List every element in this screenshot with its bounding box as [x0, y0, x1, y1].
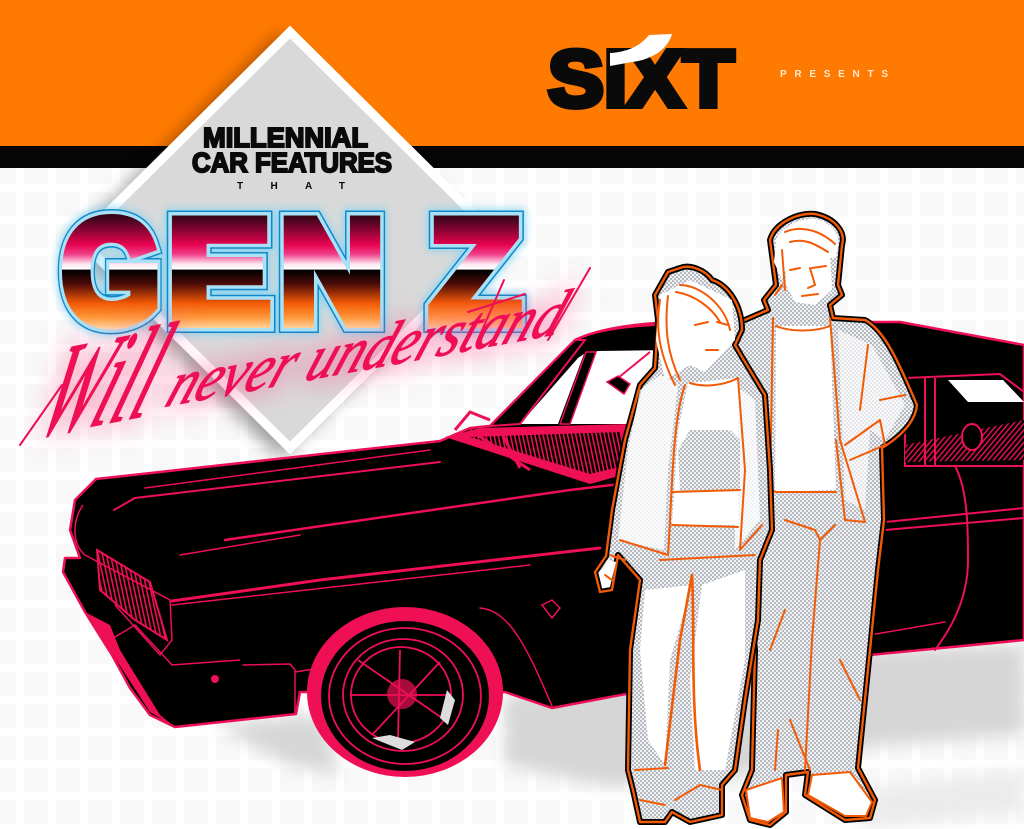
- title: GEN Z chrome lettering: Z: [430, 190, 520, 353]
- woman hair and face: [656, 280, 735, 380]
- script tagline: will never understand: [20, 268, 590, 468]
- header band: [0, 0, 1024, 168]
- man hair highlight: [774, 219, 838, 280]
- title: millennial car features that: [192, 122, 392, 192]
- ground shadow: [215, 645, 1024, 829]
- car body lines: [114, 450, 1024, 714]
- woman hand: [599, 560, 616, 588]
- man detail lines: [770, 229, 905, 770]
- man tee: [775, 326, 836, 492]
- title: GEN Z chrome lettering: N: [280, 190, 384, 353]
- car grille and front end: [75, 505, 240, 727]
- man jacket highlight: [838, 330, 905, 510]
- presents label: PRESENTS: [780, 69, 888, 80]
- car cowl and wipers: [445, 324, 680, 484]
- woman jacket highlight: [618, 375, 678, 550]
- title: GEN Z chrome lettering: N: [280, 190, 384, 353]
- car mirror: [607, 352, 650, 394]
- woman silhouette: [595, 267, 772, 822]
- man face: [785, 252, 832, 305]
- title: GEN Z chrome lettering: E: [168, 190, 270, 353]
- script tagline: will never understand: Will: [20, 293, 192, 468]
- woman figure: [595, 267, 772, 822]
- title: GEN Z chrome lettering: G: [62, 190, 160, 353]
- woman trouser highlights: [640, 585, 692, 765]
- title: GEN Z chrome lettering: G: [62, 190, 160, 353]
- man shoes: [746, 772, 872, 822]
- logo: Sixt: SIXT: [548, 34, 734, 123]
- title: GEN Z chrome lettering: [62, 190, 520, 353]
- title: GEN Z chrome lettering: E: [168, 190, 270, 353]
- car: [63, 322, 1024, 777]
- title: millennial car features that: THAT: [237, 181, 345, 192]
- title: GEN Z chrome lettering: G: [62, 190, 160, 353]
- car windshield glass: [520, 350, 670, 424]
- car body: [63, 322, 1024, 727]
- woman detail lines: [605, 285, 762, 805]
- title: GEN Z chrome lettering: E: [168, 190, 270, 353]
- woman tee: [672, 378, 738, 525]
- woman tee print: [678, 430, 740, 492]
- script tagline: will never understand: never understand: [157, 277, 579, 422]
- title: millennial car features that: MILLENNIAL: [203, 122, 368, 153]
- title: millennial car features that: CAR FEATURES: [192, 147, 392, 178]
- car side windows: [905, 374, 1024, 466]
- title: GEN Z chrome lettering: E: [168, 190, 270, 353]
- title: GEN Z chrome lettering: N: [280, 190, 384, 353]
- title: GEN Z chrome lettering: Z: [430, 190, 520, 353]
- script tagline: will never understand: Will: [20, 293, 192, 468]
- title: GEN Z chrome lettering: N: [280, 190, 384, 353]
- title: GEN Z chrome lettering: Z: [430, 190, 520, 353]
- title: GEN Z chrome lettering: Z: [430, 190, 520, 353]
- script tagline: will never understand: never understand: [157, 277, 579, 422]
- man figure: [700, 214, 917, 825]
- title: GEN Z chrome lettering: G: [62, 190, 160, 353]
- wheel: [307, 607, 503, 777]
- car emblem: [542, 600, 560, 618]
- diamond panel: [65, 32, 500, 459]
- man silhouette: [700, 214, 917, 825]
